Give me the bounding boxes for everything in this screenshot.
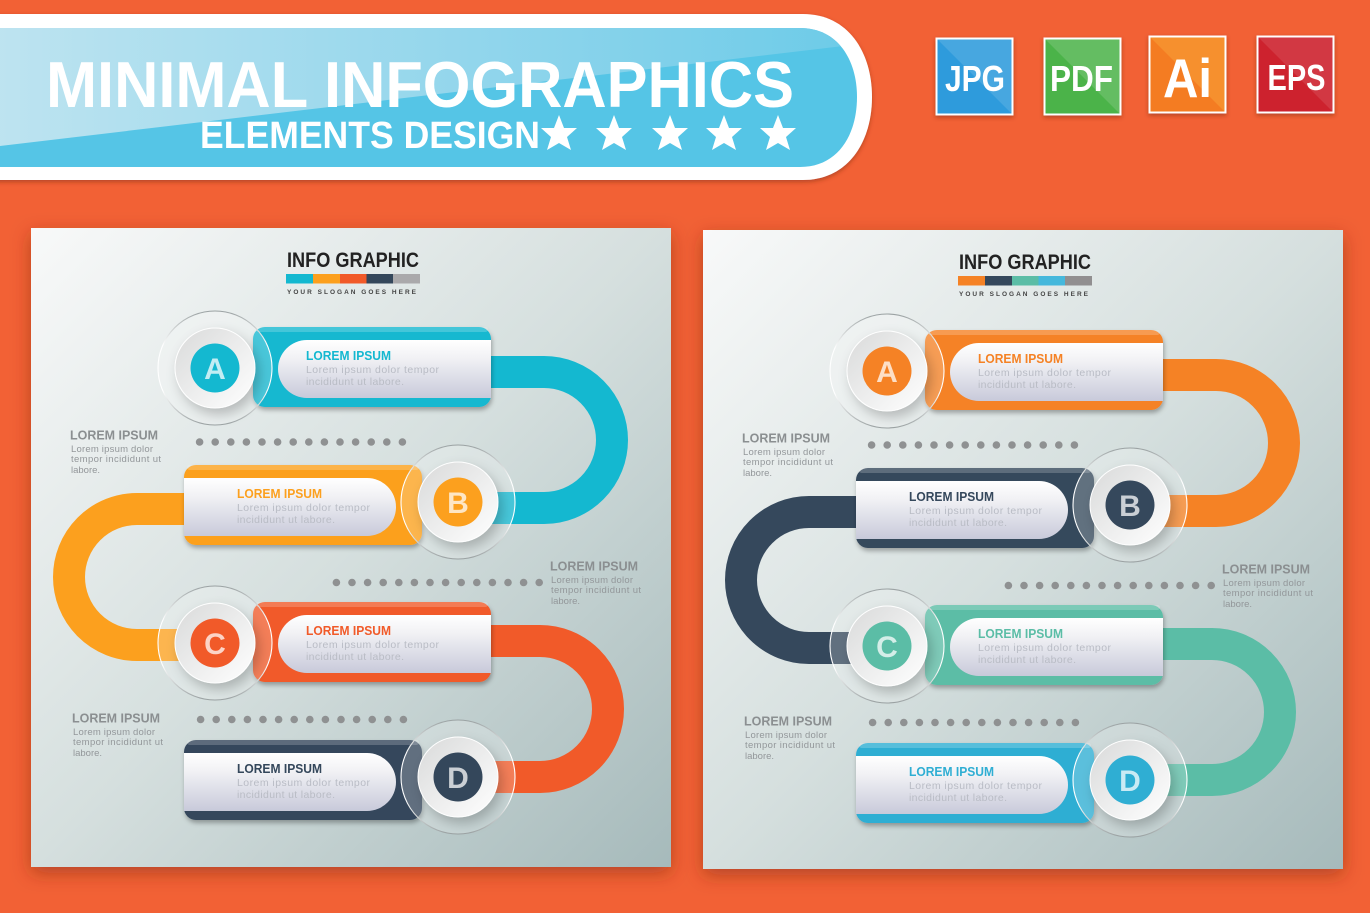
panel background (703, 230, 1343, 869)
step C: C (876, 631, 898, 664)
heading (286, 249, 420, 296)
step D: incididunt ut labore. (237, 789, 335, 801)
step D: Lorem ipsum dolor tempor (909, 780, 1042, 792)
rating stars (541, 115, 796, 150)
step B (184, 445, 515, 559)
side note 2: Lorem ipsum dolor (1223, 578, 1305, 589)
side note 2: labore. (1223, 599, 1252, 610)
side note 3: Lorem ipsum dolor (73, 727, 155, 738)
side note 1: tempor incididunt ut (743, 457, 833, 468)
icon: JPG: JPG (945, 58, 1005, 99)
dotted row 1 (196, 438, 406, 446)
icon: EPS: EPS (1268, 57, 1326, 98)
step A (158, 311, 491, 425)
connector: C to D (1152, 644, 1280, 780)
side note 1: LOREM IPSUM (70, 428, 158, 442)
connector: B to C (741, 512, 872, 648)
dotted row 2 (1005, 582, 1215, 589)
icon: EPS (1258, 36, 1334, 112)
icon: Ai (1150, 36, 1226, 112)
side note 1: tempor incididunt ut (71, 454, 161, 465)
step A: A (204, 353, 226, 386)
banner (0, 14, 872, 180)
step C: incididunt ut labore. (978, 654, 1076, 666)
step A: incididunt ut labore. (978, 379, 1076, 391)
connector: A to B (480, 372, 612, 508)
step C: Lorem ipsum dolor tempor (978, 642, 1112, 654)
step B: Lorem ipsum dolor tempor (909, 505, 1042, 517)
side note 1: Lorem ipsum dolor (71, 444, 153, 455)
step C (158, 586, 491, 700)
side note 2: tempor incididunt ut (1223, 588, 1313, 599)
icon: PDF: PDF (1050, 58, 1113, 99)
step C: Lorem ipsum dolor tempor (306, 639, 440, 651)
step D: LOREM IPSUM (237, 762, 322, 776)
side note 2: tempor incididunt ut (551, 585, 641, 596)
step D (184, 720, 515, 834)
side note 1 (742, 430, 833, 479)
side note 3 (72, 710, 163, 759)
heading: YOUR SLOGAN GOES HERE (287, 289, 417, 296)
side note 1: Lorem ipsum dolor (743, 447, 825, 458)
side note 3: tempor incididunt ut (745, 740, 835, 751)
panel: left infographic (31, 228, 671, 867)
connector: B to C (69, 509, 200, 645)
connector: C to D (480, 641, 608, 777)
step A: LOREM IPSUM (978, 352, 1063, 366)
dotted row 2 (333, 579, 543, 586)
banner fill (0, 28, 857, 167)
banner subtitle: ELEMENTS DESIGN (200, 115, 540, 157)
dotted row 3 (197, 716, 407, 723)
banner gloss (0, 20, 860, 148)
dotted row 3 (869, 719, 1079, 726)
step A: LOREM IPSUM (306, 349, 391, 363)
step B: incididunt ut labore. (237, 514, 335, 526)
side note 3: LOREM IPSUM (72, 710, 160, 726)
panel background (31, 228, 671, 867)
step D: D (1119, 765, 1141, 798)
step B: B (1119, 490, 1141, 523)
step C: LOREM IPSUM (978, 627, 1063, 641)
heading: YOUR SLOGAN GOES HERE (959, 291, 1089, 298)
step C: LOREM IPSUM (306, 624, 391, 638)
side note 3: labore. (745, 751, 774, 762)
panel: right infographic (703, 230, 1343, 869)
step B: B (447, 487, 469, 520)
step A: Lorem ipsum dolor tempor (306, 364, 440, 376)
step A: incididunt ut labore. (306, 376, 404, 388)
step D (856, 723, 1187, 837)
step A: Lorem ipsum dolor tempor (978, 367, 1112, 379)
banner title: MINIMAL INFOGRAPHICS (46, 48, 794, 121)
dotted row 1 (868, 441, 1078, 449)
side note 2: LOREM IPSUM (1222, 562, 1310, 576)
side note 3: Lorem ipsum dolor (745, 730, 827, 741)
step B: LOREM IPSUM (237, 487, 322, 501)
step C (830, 589, 1163, 703)
icon: Ai: Ai (1163, 47, 1212, 109)
step B: incididunt ut labore. (909, 517, 1007, 529)
banner frame (0, 14, 872, 180)
step C: C (204, 628, 226, 661)
side note 3 (744, 714, 835, 762)
side note 1: labore. (71, 465, 100, 476)
side note 2: Lorem ipsum dolor (551, 575, 633, 586)
side note 1: labore. (743, 468, 772, 479)
side note 2: LOREM IPSUM (550, 558, 638, 574)
step A: A (876, 356, 898, 389)
heading: INFO GRAPHIC (959, 251, 1091, 274)
step D: LOREM IPSUM (909, 765, 994, 779)
side note 3: labore. (73, 748, 102, 759)
step B: LOREM IPSUM (909, 490, 994, 504)
step D: Lorem ipsum dolor tempor (237, 777, 370, 789)
side note 2: labore. (551, 596, 580, 607)
step B: Lorem ipsum dolor tempor (237, 502, 370, 514)
heading: INFO GRAPHIC (287, 249, 419, 272)
side note 2 (550, 558, 641, 607)
heading (958, 251, 1092, 298)
step A (830, 314, 1163, 428)
side note 1: LOREM IPSUM (742, 430, 830, 446)
side note 3: tempor incididunt ut (73, 737, 163, 748)
step C: incididunt ut labore. (306, 651, 404, 663)
step D: incididunt ut labore. (909, 792, 1007, 804)
icon: JPG (936, 38, 1012, 114)
side note 2 (1222, 562, 1313, 610)
icon: PDF (1044, 38, 1120, 114)
side note 1 (70, 428, 161, 476)
connector: A to B (1152, 375, 1284, 511)
step D: D (447, 762, 469, 795)
side note 3: LOREM IPSUM (744, 714, 832, 728)
step B (856, 448, 1187, 562)
